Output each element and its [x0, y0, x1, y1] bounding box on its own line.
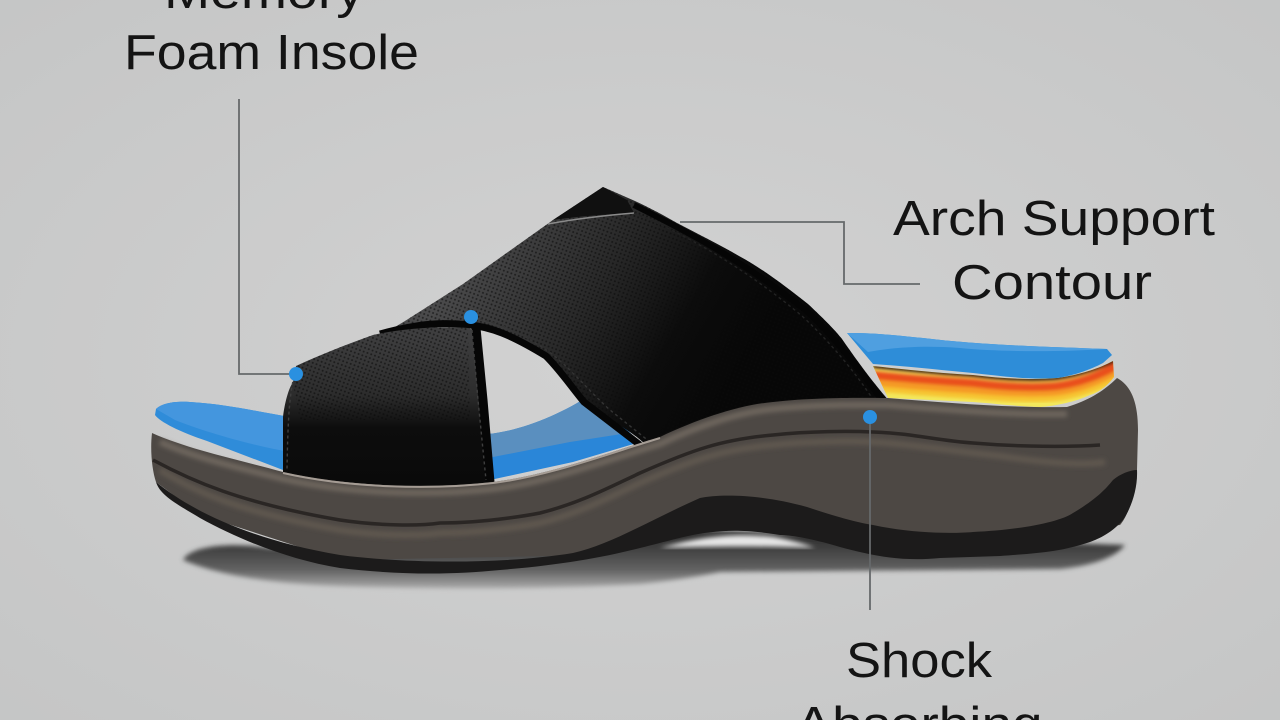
leader: arch support contour [680, 222, 920, 284]
rear strap: black leather [370, 187, 890, 445]
label: arch support contour: Contour [952, 256, 1152, 310]
leader: memory foam insole [239, 99, 303, 381]
sandal [151, 187, 1138, 574]
strap edge stitching [476, 328, 490, 482]
label: arch support contour: Arch Support [893, 192, 1215, 246]
midsole highlights [160, 405, 1105, 535]
rim highlight [283, 438, 660, 487]
strap stitching and piping [634, 205, 882, 400]
outsole: black tread [156, 470, 1137, 574]
label: shock absorbing [796, 634, 1042, 720]
marker: strap point [464, 310, 478, 324]
forefoot insole: blue [155, 402, 290, 472]
label: arch support contour [893, 192, 1215, 310]
heel insole: blue top [847, 333, 1112, 379]
sole groove [153, 431, 1100, 525]
front strap: black leather [283, 327, 494, 486]
light under arch [660, 535, 815, 548]
label: memory foam insole: Foam Insole [124, 26, 419, 80]
leader: shock absorbing [863, 410, 877, 610]
ground shadow [183, 530, 1125, 588]
strap mesh top [553, 187, 634, 220]
heel foam: colored layers [873, 361, 1114, 407]
label: memory foam insole [124, 0, 419, 80]
midfoot insole: blue [488, 395, 640, 480]
label: shock absorbing: Shock [846, 634, 993, 688]
midsole: shock absorbing base [151, 378, 1138, 560]
